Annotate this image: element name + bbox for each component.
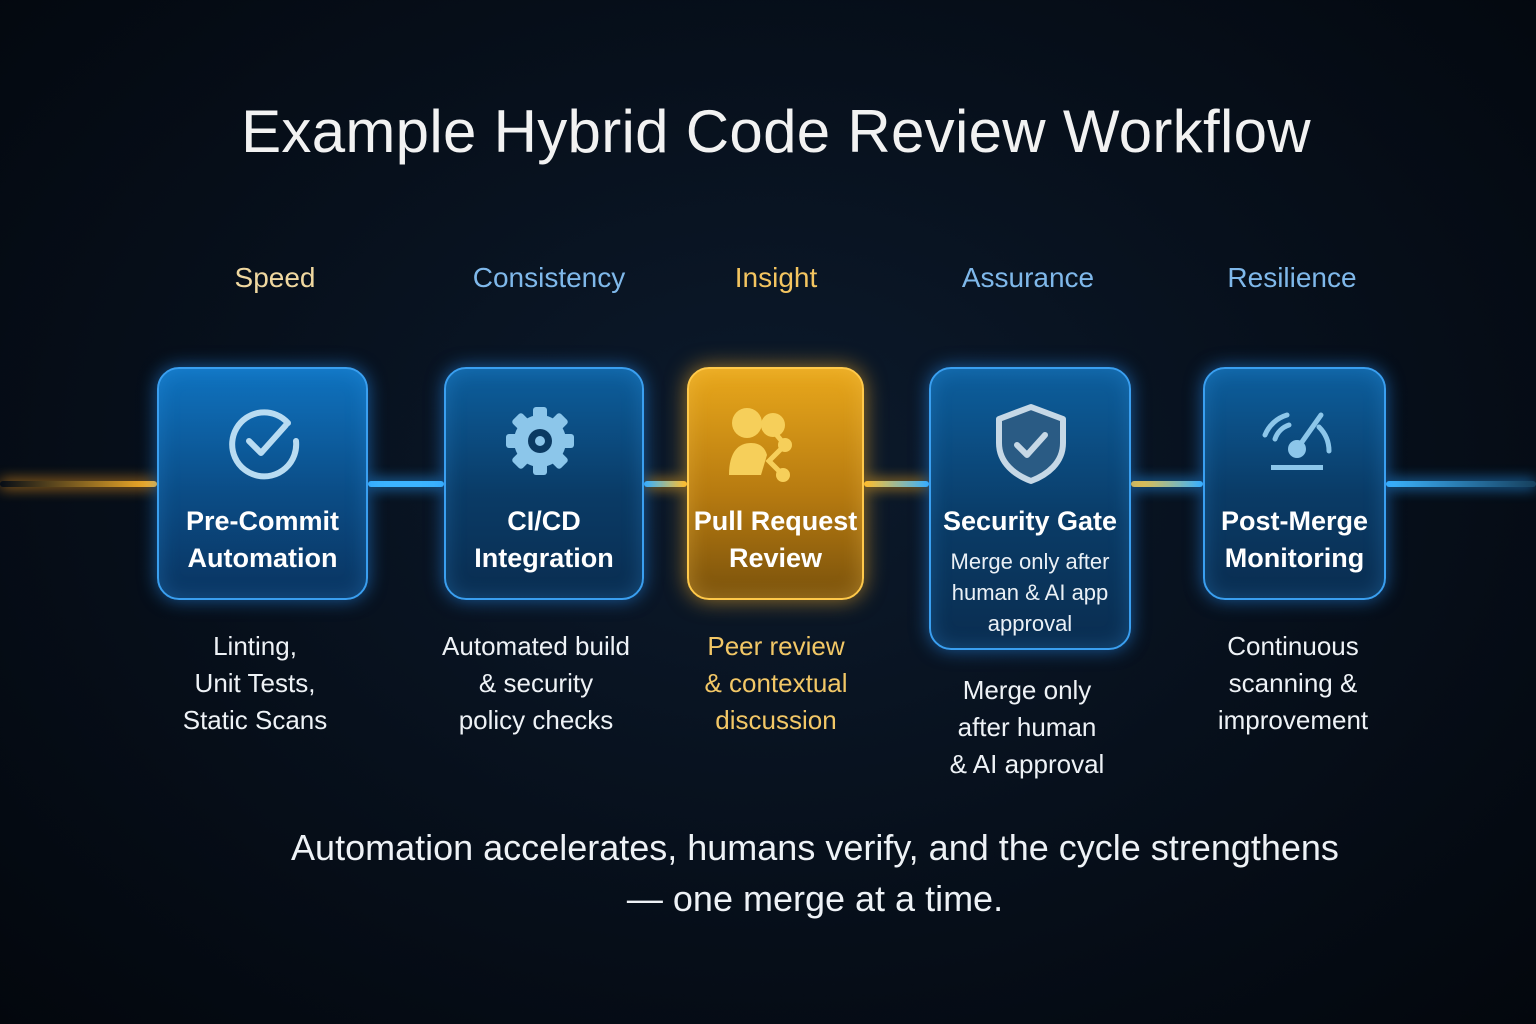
- card: CI/CD Integration: CI/CD: [507, 506, 581, 536]
- icon: shield: [996, 404, 1066, 484]
- connector line: [0, 470, 1536, 498]
- card: Pre-Commit Automation: Automation: [188, 543, 337, 573]
- desc: post-merge: scanning &: [1229, 668, 1357, 698]
- card: Pull Request Review: Review: [729, 543, 822, 573]
- title: Example Hybrid Code Review Workflow: [241, 98, 1311, 165]
- desc: post-merge: [1218, 631, 1368, 735]
- card: Pre-Commit Automation: [157, 367, 368, 600]
- desc: pull request: & contextual: [704, 668, 848, 698]
- card: CI/CD Integration: [444, 367, 644, 600]
- desc: security gate: [950, 675, 1104, 779]
- desc: pull request: [704, 631, 848, 735]
- desc: pull request: Peer review: [707, 631, 845, 661]
- card: CI/CD Integration: Integration: [474, 543, 614, 573]
- desc: pull request: discussion: [715, 705, 837, 735]
- desc: ci/cd: & security: [479, 668, 593, 698]
- desc: security gate: after human: [958, 712, 1096, 742]
- icon: gauge: [1262, 412, 1332, 470]
- text: card subtext: human & AI app: [952, 580, 1108, 605]
- card: Security Gate: [929, 367, 1131, 650]
- footer tagline: — one merge at a time.: [627, 878, 1003, 919]
- card: Pull Request Review: [687, 367, 864, 600]
- text: card subtext: approval: [988, 611, 1072, 636]
- footer tagline: Automation accelerates, humans verify, and the cycle strengthens: [291, 827, 1339, 868]
- icon: people share: [729, 408, 792, 482]
- card: Security Gate: Security Gate: [943, 506, 1117, 536]
- label: Assurance: Assurance: [962, 262, 1094, 293]
- label: Resilience: Resilience: [1227, 262, 1357, 293]
- card: Post-Merge Monitoring: Monitoring: [1225, 543, 1364, 573]
- card: Post-Merge Monitoring: Post-Merge: [1221, 506, 1368, 536]
- desc: ci/cd: policy checks: [459, 705, 613, 735]
- desc: post-merge: Continuous: [1227, 631, 1359, 661]
- text: card subtext: Merge only after: [951, 549, 1109, 574]
- desc: security gate: & AI approval: [950, 749, 1104, 779]
- label: Consistency: Consistency: [473, 262, 625, 293]
- desc: pre-commit: [183, 631, 327, 735]
- desc: pre-commit: Unit Tests,: [195, 668, 315, 698]
- desc: ci/cd: [442, 631, 630, 735]
- desc: pre-commit: Static Scans: [183, 705, 327, 735]
- card: Pull Request Review: Pull Request: [694, 506, 857, 536]
- desc: ci/cd: Automated build: [442, 631, 630, 661]
- label: Speed: Speed: [235, 262, 315, 293]
- footer tagline: [291, 827, 1339, 919]
- text: card subtext: [951, 549, 1110, 636]
- card: Pre-Commit Automation: Pre-Commit: [186, 506, 339, 536]
- desc: post-merge: improvement: [1218, 705, 1368, 735]
- card: Post-Merge Monitoring: [1203, 367, 1386, 600]
- label: Insight: Insight: [735, 262, 817, 293]
- desc: security gate: Merge only: [963, 675, 1091, 705]
- icon: gear: [506, 407, 574, 475]
- icon: check circle: [229, 409, 300, 480]
- desc: pre-commit: Linting,: [213, 631, 297, 661]
